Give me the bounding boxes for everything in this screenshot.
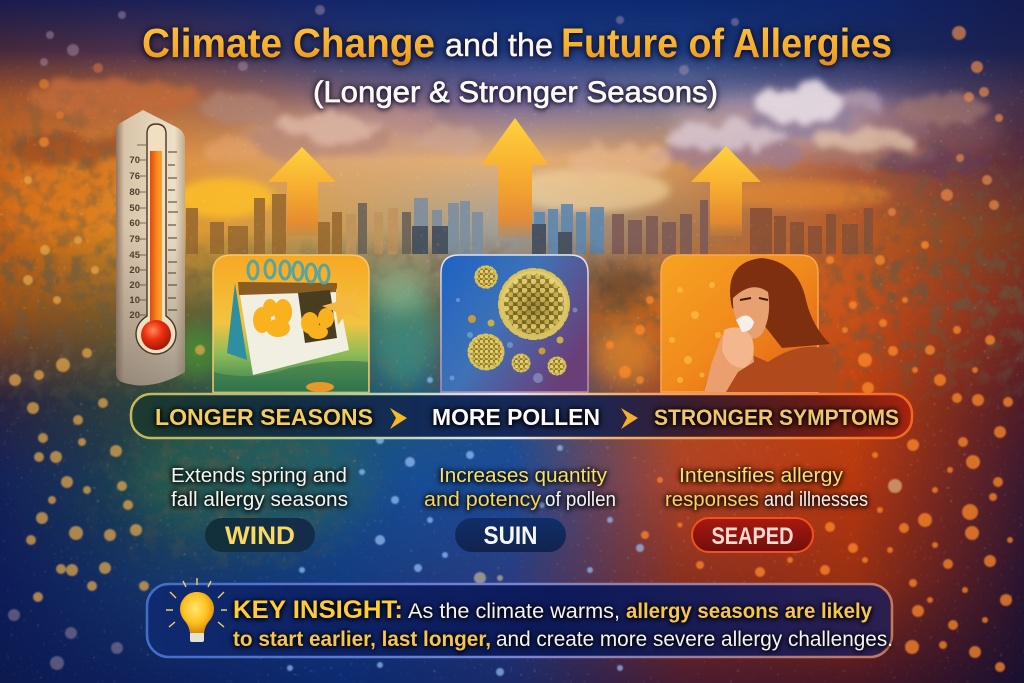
scale labels: 70 xyxy=(129,155,140,166)
text block: longer seasons description xyxy=(171,465,348,511)
text block: stronger symptoms description: and illnesses xyxy=(764,489,868,511)
pill: seaped xyxy=(692,518,813,552)
mercury column xyxy=(150,151,162,327)
icon: calendar xyxy=(227,260,362,375)
step: longer seasons: LONGER SEASONS xyxy=(155,404,373,430)
callout box xyxy=(147,584,892,657)
hair xyxy=(730,258,830,348)
panel: pollen card xyxy=(441,255,588,392)
text block: stronger symptoms description: responses xyxy=(665,489,759,511)
pill: seaped: SEAPED xyxy=(712,523,794,550)
shirt xyxy=(704,347,838,392)
text block: longer seasons description: fall allergy seasons xyxy=(171,489,348,511)
scale labels: 60 xyxy=(129,218,140,229)
pill: wind: WIND xyxy=(225,522,295,550)
icon: pollen grains xyxy=(468,266,566,374)
scale labels: 20 xyxy=(129,280,140,291)
flow bar xyxy=(131,394,912,438)
text: key insight lines: KEY INSIGHT: xyxy=(233,596,403,624)
arrow: chevron two xyxy=(621,408,638,429)
icon: light bulb xyxy=(166,578,227,642)
panel: symptoms card xyxy=(661,255,838,392)
text: key insight lines xyxy=(233,596,893,651)
scale labels: 20 xyxy=(129,265,140,276)
text block: more pollen description: of pollen xyxy=(545,489,616,511)
icon: orchid flowers xyxy=(253,288,362,339)
land texture xyxy=(0,90,1024,570)
scale labels: 80 xyxy=(129,187,140,198)
title xyxy=(142,20,892,66)
text block: more pollen description: and potency xyxy=(424,489,541,511)
text: key insight lines: allergy seasons are likely xyxy=(626,600,872,623)
cool clouds right xyxy=(658,136,802,168)
card background xyxy=(441,255,588,392)
card background xyxy=(213,255,369,392)
callout: key insight xyxy=(147,578,893,657)
scale labels xyxy=(129,155,141,321)
subtitle: (Longer & Stronger Seasons) xyxy=(313,76,718,109)
scale labels: 10 xyxy=(129,295,140,306)
scale labels: 79 xyxy=(129,234,140,245)
thermometer xyxy=(116,110,185,385)
step: more pollen: MORE POLLEN xyxy=(432,404,600,430)
scale labels: 76 xyxy=(129,171,140,182)
scale labels: 45 xyxy=(129,250,141,261)
arrow: more pollen up xyxy=(481,118,549,238)
title: Climate Change xyxy=(142,20,435,66)
arrow: stronger symptoms up xyxy=(691,146,761,236)
thermometer body xyxy=(116,110,185,385)
text: key insight lines: and create more severe allergy challenges. xyxy=(496,628,893,651)
face xyxy=(733,287,769,339)
step: stronger symptoms: STRONGER SYMPTOMS xyxy=(654,405,899,430)
title: and the xyxy=(445,27,553,63)
arrow: chevron one xyxy=(390,408,407,429)
clouds xyxy=(0,78,1000,245)
text block: longer seasons description: Extends spring and xyxy=(171,465,347,487)
illustration: woman sneezing xyxy=(704,258,838,392)
pill: wind xyxy=(205,518,315,552)
icon: large pollen grain xyxy=(501,271,567,337)
pill: suin xyxy=(455,518,566,552)
arrow: longer seasons up xyxy=(268,147,336,236)
scale labels: 50 xyxy=(129,203,140,214)
text block: stronger symptoms description: Intensifies allergy xyxy=(679,465,843,487)
card background xyxy=(661,255,818,392)
panel: calendar card xyxy=(213,255,369,392)
text block: stronger symptoms description xyxy=(665,465,868,511)
scale labels: 20 xyxy=(129,310,140,321)
city skyline xyxy=(186,194,873,254)
pill: suin: SUIN xyxy=(484,522,538,550)
text: key insight lines: As the climate warms, xyxy=(408,600,620,623)
hands and tissue xyxy=(704,335,754,392)
warm clouds left xyxy=(30,78,200,118)
title: Future of Allergies xyxy=(561,20,892,66)
text block: more pollen description xyxy=(424,465,616,511)
thermometer tube xyxy=(136,124,176,354)
text: key insight lines: to start earlier, last longer, xyxy=(233,628,491,651)
text block: more pollen description: Increases quantity xyxy=(439,465,607,487)
mercury bulb xyxy=(141,320,171,350)
